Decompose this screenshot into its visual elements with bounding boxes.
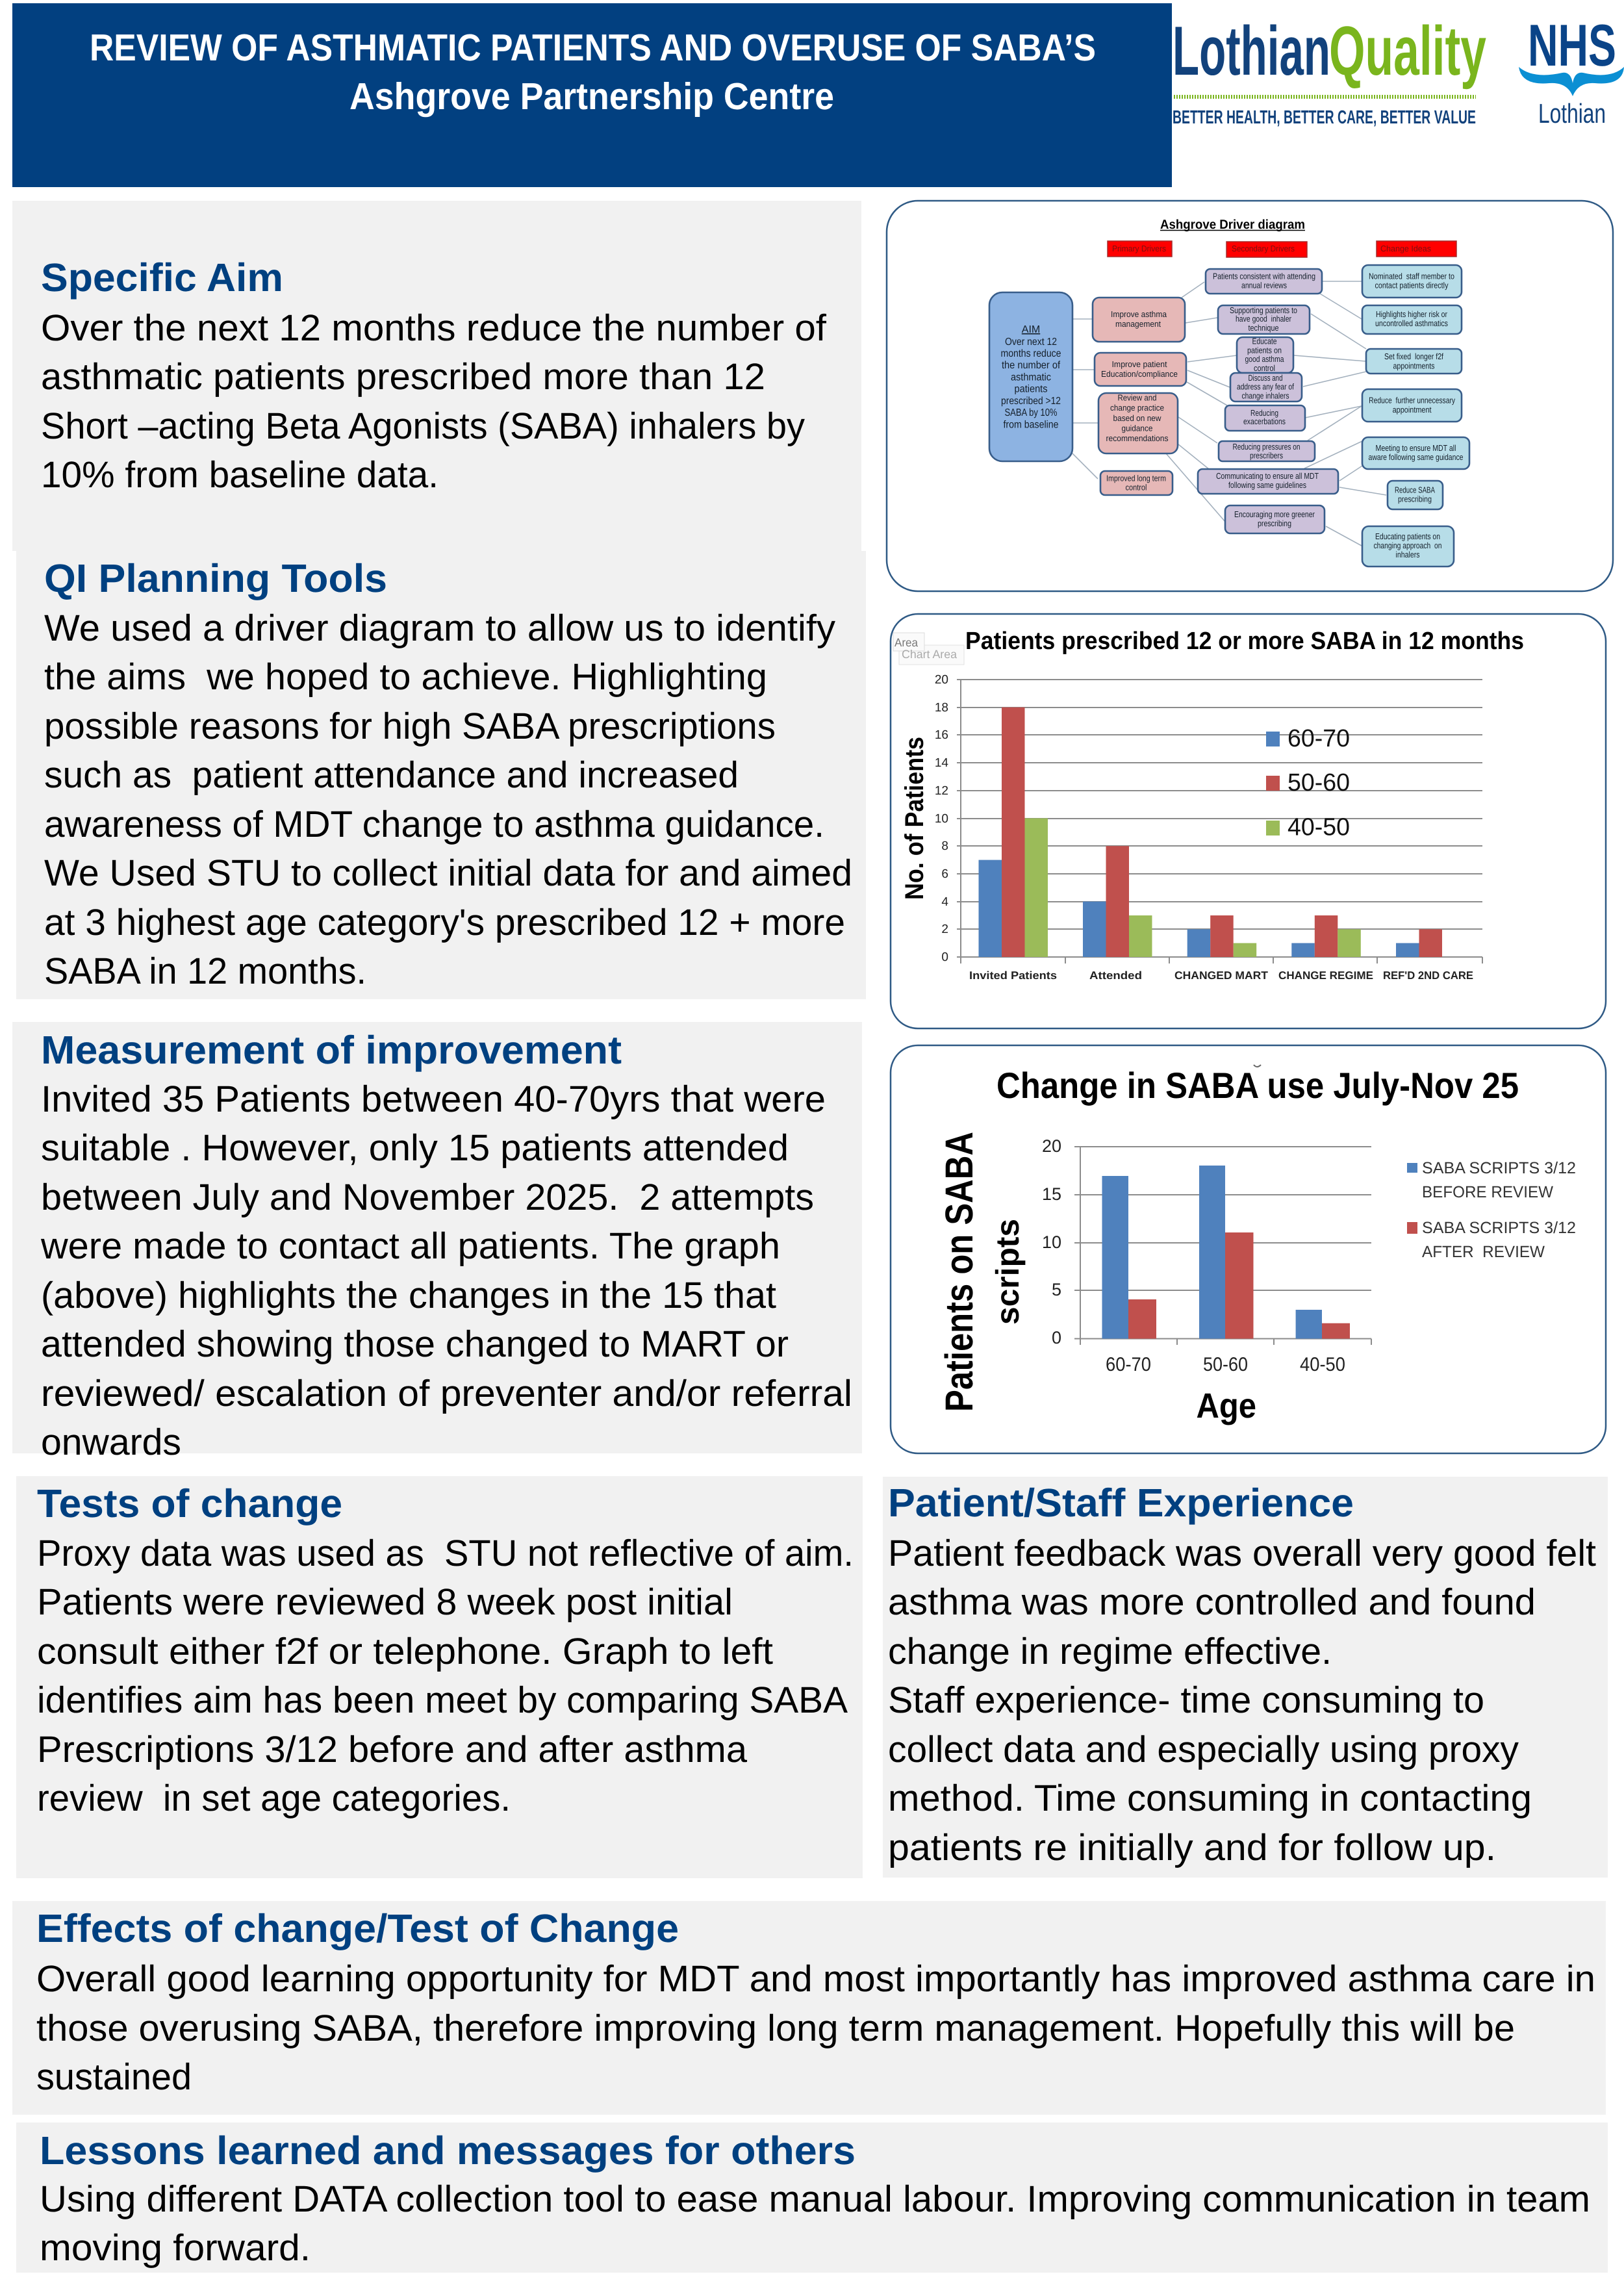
secondary driver boxes: following same guidelines — [1228, 480, 1306, 490]
gridlines and axes — [957, 680, 1482, 963]
logo: Lothian Quality — [1173, 12, 1486, 128]
text: patient/staff experience body: change in regime effective. — [888, 1631, 1332, 1672]
panel: lessons learned — [16, 2123, 1608, 2273]
change idea boxes: Set fixed longer f2f — [1384, 351, 1443, 361]
text: tests of change body: consult either f2f or telephone. Graph to left — [37, 1631, 773, 1672]
chart title: Change in SABA use July-Nov 25 — [996, 1065, 1519, 1106]
y axis labels: 20 — [935, 673, 948, 687]
legend: SABA SCRIPTS 3/12 — [1422, 1159, 1576, 1177]
text: QI planning tools body: We used a driver diagram to allow us to identify — [44, 607, 836, 649]
chart area tooltip: Area — [894, 636, 919, 649]
primary driver boxes — [1093, 298, 1186, 495]
secondary driver boxes: have good inhaler — [1236, 314, 1292, 324]
change idea boxes: uncontrolled asthmatics — [1375, 318, 1448, 328]
y axis title: No. of Patients — [900, 737, 929, 900]
change idea boxes: contact patients directly — [1375, 281, 1449, 290]
secondary driver boxes: exacerbations — [1243, 416, 1286, 426]
legend: 50-60 — [1288, 769, 1350, 797]
legend: AFTER REVIEW — [1422, 1243, 1545, 1261]
legend: BEFORE REVIEW — [1422, 1183, 1553, 1201]
logo: Lothian Quality: Lothian — [1173, 12, 1330, 90]
driver diagram title: Ashgrove Driver diagram — [1160, 218, 1305, 232]
panel: effects of change — [12, 1901, 1606, 2115]
y axis labels — [935, 673, 948, 964]
logo: NHS Lothian — [1519, 13, 1624, 129]
change idea boxes: aware following same guidance — [1368, 452, 1463, 462]
panel: tests of change — [16, 1476, 863, 1878]
secondary driver boxes: prescribing — [1258, 518, 1291, 528]
text: QI planning tools body — [44, 607, 852, 992]
text: measurement body: attended showing those changed to MART or — [41, 1323, 789, 1365]
poster subtitle: Ashgrove Partnership Centre — [349, 75, 834, 118]
text: QI planning tools body: possible reasons for high SABA prescriptions — [44, 706, 776, 747]
column headers: Primary Drivers — [1112, 244, 1166, 253]
secondary driver boxes: technique — [1249, 323, 1278, 333]
change idea boxes: appointment — [1393, 405, 1432, 415]
x axis labels: 40-50 — [1300, 1354, 1345, 1375]
panel: bar chart patients prescribed — [891, 614, 1606, 1028]
change idea boxes: Educating patients on — [1375, 531, 1440, 541]
y axis labels: 10 — [935, 812, 948, 826]
panel: measurement of improvement — [12, 1022, 862, 1463]
heading: patient/staff experience: Patient/Staff Experience — [888, 1481, 1354, 1525]
secondary driver boxes: Educate — [1252, 337, 1277, 346]
aim box — [989, 292, 1072, 461]
text: patient/staff experience body: Staff experience- time consuming to — [888, 1679, 1484, 1721]
y axis labels: 5 — [1052, 1280, 1061, 1299]
secondary driver boxes: control — [1254, 363, 1275, 373]
bars: 60-70 — [978, 860, 1419, 957]
y axis labels: 10 — [1042, 1232, 1061, 1252]
panel: bar chart change in SABA use — [891, 1045, 1606, 1453]
text: QI planning tools body: SABA in 12 months. — [44, 950, 366, 992]
aim box: from baseline — [1003, 420, 1059, 431]
primary driver boxes: change practice — [1110, 403, 1164, 413]
poster title: REVIEW OF ASTHMATIC PATIENTS AND OVERUSE OF SABA’S — [90, 27, 1096, 69]
chart title: Patients prescribed 12 or more SABA in 12 months — [965, 628, 1524, 655]
logo: Lothian Quality: BETTER HEALTH, BETTER CARE, BETTER VALUE — [1173, 107, 1476, 128]
secondary driver boxes: patients on — [1247, 346, 1282, 355]
column headers: Change Ideas — [1380, 244, 1431, 253]
aim box: SABA by 10% — [1004, 407, 1058, 418]
y axis labels: 12 — [935, 784, 948, 798]
aim box: the number of — [1002, 360, 1060, 371]
x axis labels: CHANGE REGIME — [1278, 969, 1373, 982]
text: tests of change body: Prescriptions 3/12 before and after asthma — [37, 1729, 747, 1770]
panel: specific aim — [12, 201, 861, 551]
change idea boxes: Nominated staff member to — [1369, 272, 1454, 281]
text: tests of change body — [37, 1533, 854, 1819]
text: lessons learned body: moving forward. — [40, 2227, 311, 2269]
change idea boxes: prescribing — [1398, 494, 1432, 504]
primary driver boxes: based on new — [1113, 413, 1161, 423]
text: tests of change body: Proxy data was used as STU not reflective of aim. — [37, 1533, 854, 1574]
change idea boxes: Highlights higher risk or — [1376, 309, 1448, 319]
text: QI planning tools body: We Used STU to collect initial data for and aimed — [44, 852, 852, 894]
x axis labels: Attended — [1089, 969, 1142, 982]
secondary driver boxes: Supporting patients to — [1230, 305, 1297, 315]
text: effects of change body: sustained — [36, 2056, 192, 2098]
primary driver boxes: Improve asthma — [1111, 309, 1167, 319]
primary driver boxes: management — [1115, 319, 1161, 329]
text: patient/staff experience body: patients re initially and for follow up. — [888, 1827, 1496, 1869]
heading: tests of change: Tests of change — [37, 1481, 342, 1525]
text: specific aim body: Over the next 12 months reduce the number of — [41, 307, 826, 349]
chart area tooltip — [893, 633, 964, 665]
text: tests of change body: Patients were reviewed 8 week post initial — [37, 1581, 733, 1623]
y axis labels: 14 — [935, 756, 948, 770]
secondary driver boxes: Patients consistent with attending — [1213, 272, 1315, 281]
secondary driver boxes: Discuss and — [1249, 373, 1282, 383]
heading: measurement of improvement: Measurement of improvement — [41, 1028, 622, 1072]
secondary driver boxes: good asthma — [1245, 354, 1284, 364]
header banner — [12, 3, 1172, 187]
x axis labels: 50-60 — [1203, 1354, 1248, 1375]
y axis labels: 16 — [935, 728, 948, 742]
text: measurement body: (above) highlights the changes in the 15 that — [41, 1275, 776, 1316]
text: measurement body: between July and November 2025. 2 attempts — [41, 1177, 814, 1218]
text: patient/staff experience body: Patient feedback was overall very good felt — [888, 1533, 1596, 1574]
aim box: months reduce — [1000, 348, 1061, 359]
text: measurement body: Invited 35 Patients between 40-70yrs that were — [41, 1078, 826, 1120]
secondary driver boxes: Communicating to ensure all MDT — [1216, 471, 1319, 481]
legend: SABA SCRIPTS 3/12 — [1422, 1219, 1576, 1237]
text: measurement body: were made to contact all patients. The graph — [40, 1225, 780, 1267]
change idea boxes: Reduce further unnecessary — [1369, 396, 1455, 405]
bars: after review — [1128, 1232, 1350, 1338]
heading: specific aim: Specific Aim — [41, 255, 283, 300]
change idea boxes — [1362, 265, 1469, 567]
secondary driver boxes: Reducing — [1250, 408, 1278, 418]
secondary driver boxes: annual reviews — [1241, 281, 1287, 290]
primary driver boxes: control — [1125, 482, 1147, 492]
text: tests of change body: review in set age categories. — [37, 1778, 511, 1819]
panel: QI planning tools — [16, 551, 866, 999]
change idea boxes: Reduce SABA — [1395, 485, 1435, 495]
change idea boxes: inhalers — [1395, 550, 1420, 559]
text: measurement body: suitable . However, only 15 patients attended — [41, 1127, 789, 1169]
change idea boxes: changing approach on — [1373, 541, 1442, 550]
y axis labels: 2 — [941, 923, 948, 936]
y axis title: scripts — [989, 1219, 1026, 1325]
y axis title: Patients on SABA — [937, 1132, 981, 1412]
primary driver boxes: recommendations — [1106, 433, 1169, 443]
secondary driver boxes — [1198, 269, 1338, 533]
y axis labels — [1042, 1136, 1061, 1347]
aim box: asthmatic — [1011, 372, 1051, 383]
bars: 50-60 — [1002, 708, 1442, 957]
text: effects of change body: Overall good learning opportunity for MDT and most importantly has improved asthma care in — [36, 1958, 1595, 2000]
text: effects of change body: those overusing SABA, therefore improving long term management. Hopefully this will be — [36, 2008, 1515, 2049]
text: tests of change body: identifies aim has been meet by comparing SABA — [37, 1679, 848, 1721]
y axis labels: 0 — [1052, 1328, 1061, 1347]
x axis labels: 60-70 — [1106, 1354, 1151, 1375]
y axis labels: 8 — [941, 839, 948, 853]
aim box: patients — [1015, 383, 1047, 395]
text: specific aim body: 10% from baseline data. — [41, 454, 438, 496]
gridlines and axes — [1074, 1147, 1371, 1345]
text: specific aim body — [41, 307, 826, 496]
heading: lessons learned: Lessons learned and messages for others — [40, 2128, 856, 2173]
text: QI planning tools body: the aims we hoped to achieve. Highlighting — [44, 656, 767, 698]
text: measurement body: onwards — [41, 1422, 181, 1463]
panel: driver diagram — [887, 201, 1613, 591]
x axis labels: Invited Patients — [969, 969, 1057, 982]
text: specific aim body: Short –acting Beta Agonists (SABA) inhalers by — [41, 405, 805, 447]
text: QI planning tools body: awareness of MDT change to asthma guidance. — [44, 804, 824, 845]
connector lines — [1069, 281, 1386, 546]
bars: before review — [1102, 1166, 1322, 1338]
primary driver boxes: Review and — [1117, 392, 1156, 403]
y axis labels: 0 — [941, 950, 948, 964]
primary driver boxes: Education/compliance — [1101, 369, 1178, 379]
text: QI planning tools body: such as patient attendance and increased — [44, 754, 739, 796]
secondary driver boxes: address any fear of — [1237, 382, 1294, 391]
text: patient/staff experience body — [888, 1533, 1596, 1869]
secondary driver boxes: Reducing pressures on — [1233, 442, 1300, 452]
change idea boxes: Meeting to ensure MDT all — [1376, 443, 1456, 453]
primary driver boxes: guidance — [1121, 424, 1152, 433]
column headers: Secondary Drivers — [1232, 244, 1295, 253]
logo: Lothian Quality: Quality — [1329, 12, 1486, 90]
aim box: AIM — [1022, 324, 1040, 335]
y axis labels: 6 — [941, 867, 948, 881]
y axis labels: 20 — [1042, 1136, 1061, 1156]
legend: 40-50 — [1288, 814, 1350, 841]
primary driver boxes: Improved long term — [1106, 474, 1166, 483]
secondary driver boxes: change inhalers — [1242, 391, 1289, 401]
column headers — [1108, 241, 1456, 257]
text: patient/staff experience body: collect data and especially using proxy — [888, 1729, 1519, 1770]
secondary driver boxes: Encouraging more greener — [1234, 509, 1315, 519]
legend: 60-70 — [1288, 725, 1350, 752]
text: lessons learned body — [40, 2178, 1590, 2269]
text: measurement body: reviewed/ escalation of preventer and/or referral — [41, 1373, 852, 1414]
text: measurement body — [40, 1078, 852, 1463]
x axis labels — [969, 969, 1473, 982]
secondary driver boxes: prescribers — [1250, 451, 1283, 460]
x axis title: Age — [1197, 1386, 1256, 1425]
chart area tooltip: Chart Area — [902, 648, 958, 661]
y axis labels: 4 — [941, 895, 948, 909]
y axis labels: 15 — [1042, 1184, 1061, 1204]
y axis labels: 18 — [935, 701, 948, 715]
heading: effects of change: Effects of change/Test of Change — [36, 1906, 679, 1950]
heading: QI planning tools: QI Planning Tools — [44, 556, 387, 600]
bars: 40-50 — [1025, 819, 1361, 957]
aim box: Over next 12 — [1005, 337, 1057, 348]
y axis title — [937, 1132, 1026, 1412]
text: QI planning tools body: at 3 highest age category's prescribed 12 + more — [44, 902, 845, 943]
legend — [1266, 725, 1350, 841]
primary driver boxes: Improve patient — [1112, 359, 1167, 369]
x axis labels — [1106, 1354, 1345, 1375]
text: patient/staff experience body: asthma was more controlled and found — [888, 1581, 1536, 1623]
panel: patient and staff experience — [883, 1477, 1608, 1878]
text: lessons learned body: Using different DATA collection tool to ease manual labour. Improving communication in team — [40, 2178, 1590, 2220]
aim box: prescribed >12 — [1001, 396, 1061, 407]
text: effects of change body — [36, 1958, 1595, 2098]
x axis labels: CHANGED MART — [1174, 969, 1269, 982]
legend — [1407, 1159, 1576, 1261]
text: patient/staff experience body: method. Time consuming in contacting — [888, 1778, 1532, 1819]
text: specific aim body: asthmatic patients prescribed more than 12 — [41, 356, 765, 398]
x axis labels: REF'D 2ND CARE — [1383, 969, 1473, 982]
change idea boxes: appointments — [1393, 361, 1435, 371]
